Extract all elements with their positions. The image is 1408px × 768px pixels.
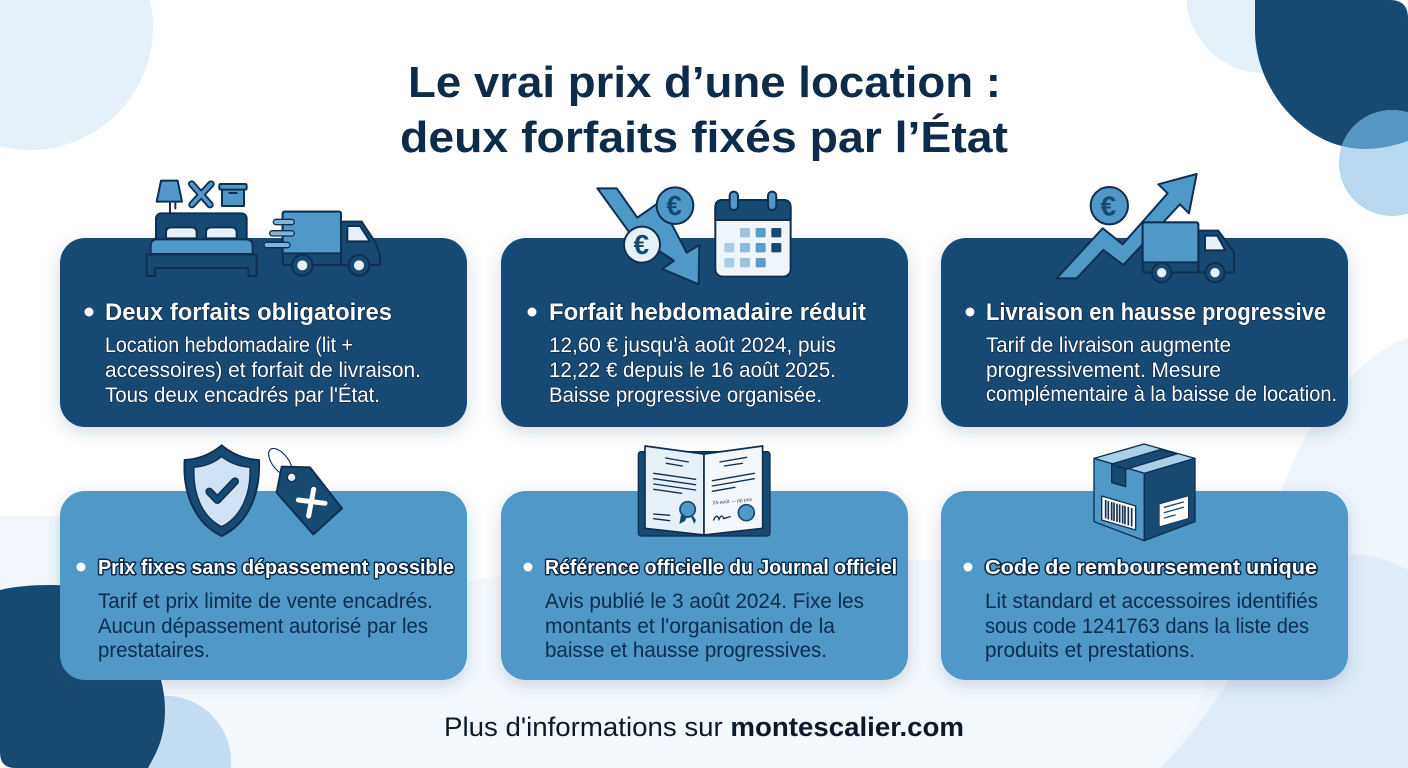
icon: shield and price tag (184, 444, 342, 536)
text: prix fixes: Aucun dépassement autorisé par les (98, 615, 428, 638)
text: livraison: progressivement. Mesure (986, 359, 1221, 382)
text: livraison: complémentaire à la baisse de location. (986, 383, 1337, 406)
title (400, 58, 1008, 162)
heading: prix fixes: Prix fixes sans dépassement possible (98, 557, 454, 579)
text: référence: baisse et hausse progressives. (545, 639, 827, 662)
text: deux forfaits (105, 334, 421, 407)
text: forfait hebdomadaire: 12,60 € jusqu'à août 2024, puis (549, 334, 836, 357)
text: forfait hebdomadaire: 12,22 € depuis le 16 août 2025. (549, 359, 836, 382)
heading: code: Code de remboursement unique (985, 557, 1317, 579)
text: prix fixes: Tarif et prix limite de vente encadrés. (98, 590, 433, 613)
heading: forfait hebdomadaire: Forfait hebdomadaire réduit (549, 299, 866, 326)
text: deux forfaits: Location hebdomadaire (lit + (105, 334, 353, 357)
text: code: produits et prestations. (985, 639, 1195, 662)
text: prix fixes (98, 590, 433, 662)
icon: falling euro arrow and calendar: € (634, 229, 650, 260)
title: deux forfaits fixés par l’État (400, 112, 1008, 162)
icon: bed, accessories and truck (147, 181, 380, 276)
text: référence (545, 590, 864, 662)
text: deux forfaits: Tous deux encadrés par l'État. (105, 384, 380, 407)
panel: deux forfaits obligatoires (60, 238, 467, 427)
heading: référence: Référence officielle du Journal officiel (545, 557, 897, 579)
text: livraison: Tarif de livraison augmente (986, 334, 1231, 357)
footer: Plus d'informations sur montescalier.com (444, 712, 964, 742)
icon: official journal book: 24-août — pp pos (712, 497, 753, 506)
heading: deux forfaits: Deux forfaits obligatoires (105, 299, 392, 326)
panel: forfait hebdomadaire (501, 238, 908, 427)
icon: official journal book (638, 446, 770, 536)
text: référence: Avis publié le 3 août 2024. Fixe les (545, 590, 864, 613)
text: prix fixes: prestataires. (98, 639, 210, 662)
heading: livraison: Livraison en hausse progressive (986, 299, 1326, 326)
text: référence: montants et l'organisation de la (545, 615, 835, 638)
text: code (985, 590, 1318, 662)
icon: falling euro arrow and calendar (597, 187, 791, 284)
panel: code de remboursement (941, 491, 1348, 680)
icon: parcel box (1094, 444, 1195, 541)
text: code: Lit standard et accessoires identifiés (985, 590, 1318, 613)
text: code: sous code 1241763 dans la liste des (985, 615, 1309, 638)
text: forfait hebdomadaire: Baisse progressive organisée. (549, 384, 822, 407)
text: livraison (986, 334, 1337, 406)
icon: rising arrow, euro coin and truck (1057, 174, 1234, 282)
panel: référence officielle (501, 491, 908, 680)
icon: falling euro arrow and calendar: € (666, 190, 682, 221)
text: forfait hebdomadaire (549, 334, 836, 407)
panel: prix fixes (60, 491, 467, 680)
text: deux forfaits: accessoires) et forfait de livraison. (105, 359, 421, 382)
panel: livraison en hausse (941, 238, 1348, 427)
title: Le vrai prix d’une location : (408, 58, 1001, 107)
icon: rising arrow, euro coin and truck: € (1101, 190, 1117, 221)
